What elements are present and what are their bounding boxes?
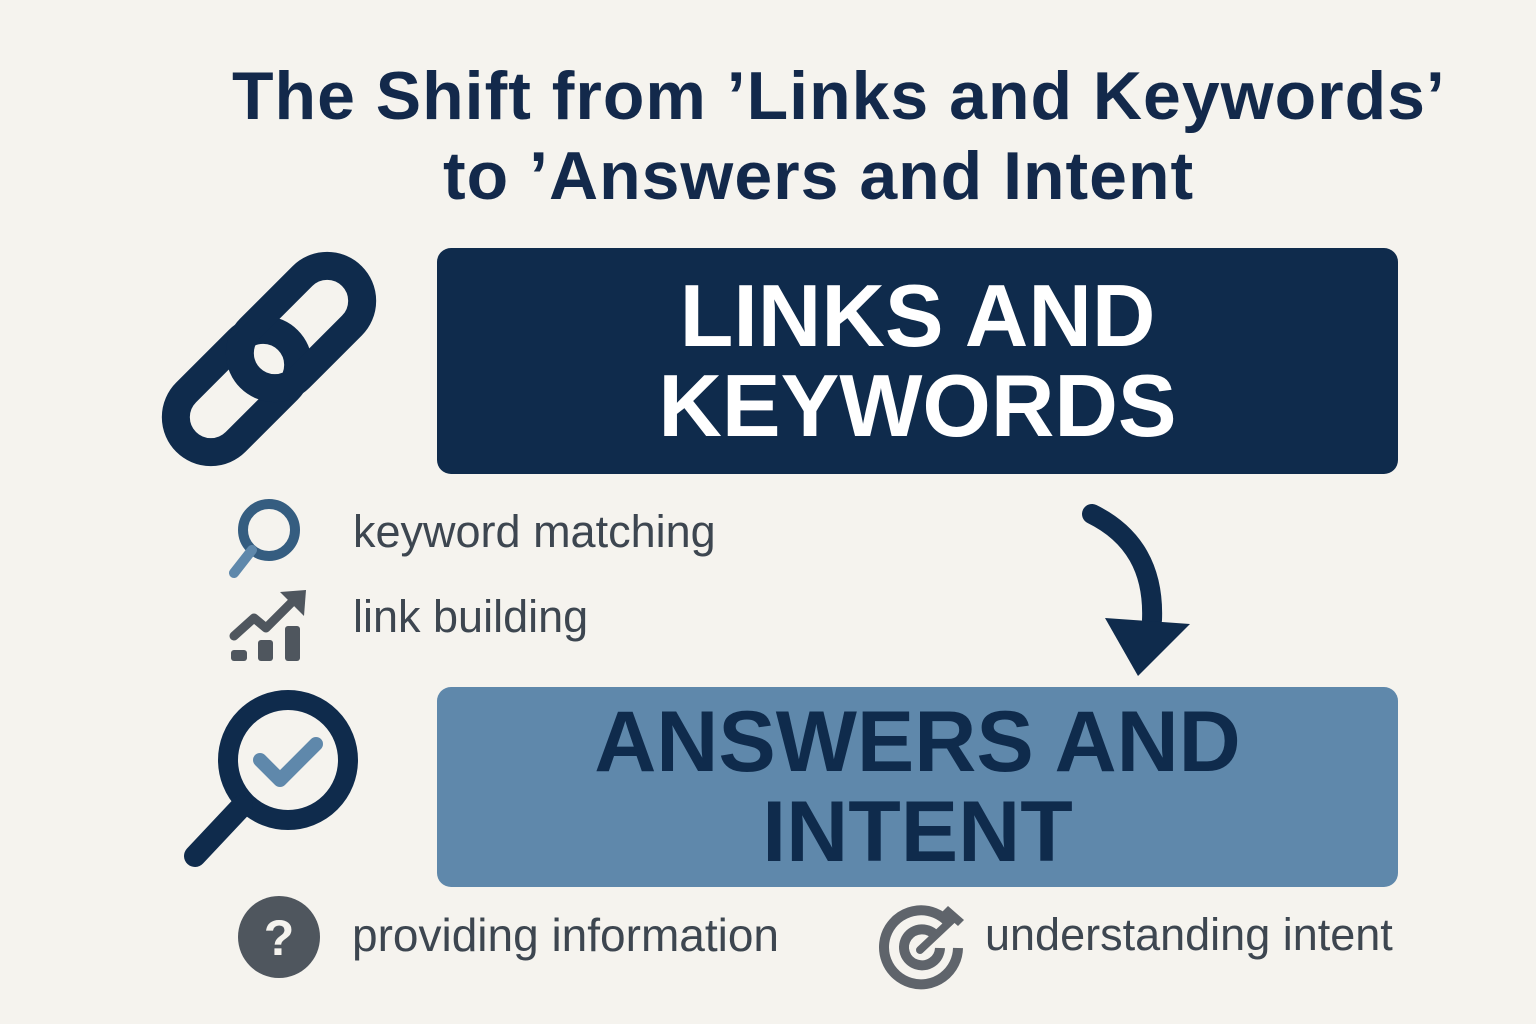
label: keyword matching: keyword matching: [353, 506, 716, 557]
icon: question: ?: [264, 910, 294, 966]
box: answers and intent: ANSWERS AND: [594, 694, 1241, 790]
icon: chain link: [162, 252, 376, 466]
title: The Shift from ’Links and Keywords’: [232, 58, 1446, 134]
label: providing information: providing information: [352, 909, 779, 961]
icon: magnifier: [229, 499, 300, 578]
box: answers and intent: [437, 687, 1398, 887]
icon: target: [879, 905, 964, 990]
label: understanding intent: understanding intent: [985, 909, 1393, 960]
arrow: [1082, 504, 1190, 676]
title: [232, 58, 1446, 214]
box: answers and intent: INTENT: [762, 784, 1073, 880]
box: links and keywords: LINKS AND: [680, 266, 1155, 365]
icon: magnifier check: [184, 690, 358, 867]
icon: question: [238, 896, 320, 978]
box: links and keywords: [437, 248, 1398, 474]
icon: chart: [230, 590, 306, 661]
title: to ’Answers and Intent: [443, 138, 1194, 214]
label: link building: link building: [353, 591, 588, 642]
box: links and keywords: KEYWORDS: [658, 356, 1177, 455]
